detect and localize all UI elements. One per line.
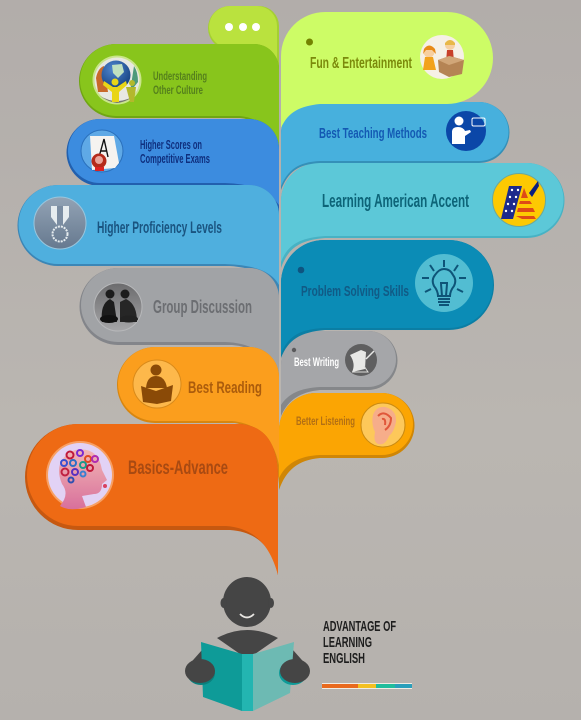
panel: best reading xyxy=(117,347,279,484)
panel: basics-advance xyxy=(25,424,278,575)
panel: best writing xyxy=(281,331,398,416)
panel: fun and entertainment xyxy=(281,12,493,128)
icon: three dots xyxy=(225,23,260,31)
panel: dots speech bubble xyxy=(208,6,279,125)
title: advantage of learning english: LEARNING xyxy=(323,634,372,651)
icon: light bulb xyxy=(415,254,473,312)
icon: exam paper xyxy=(81,130,123,172)
icon: dot xyxy=(306,38,313,46)
text: problem solving skills: Problem Solving Skills xyxy=(301,283,409,300)
panel: understanding other culture xyxy=(79,44,279,165)
text: higher proficiency levels: Higher Proficiency Levels xyxy=(97,219,222,237)
panel: best teaching methods xyxy=(281,102,510,190)
head xyxy=(186,577,309,680)
text: better listening: Better Listening xyxy=(296,416,355,428)
icon: children in box xyxy=(420,35,464,79)
icon: dot xyxy=(292,348,296,352)
icon: two people xyxy=(94,283,142,331)
text: best teaching methods: Best Teaching Methods xyxy=(319,126,427,142)
panel: group discussion xyxy=(80,268,279,405)
book xyxy=(187,642,307,711)
text: group discussion: Group Discussion xyxy=(153,296,252,317)
text: understanding other culture: Other Culture xyxy=(153,83,203,97)
icon: reader xyxy=(133,360,181,408)
icon: ear xyxy=(361,403,405,447)
text: best writing: Best Writing xyxy=(294,357,339,369)
text: best reading: Best Reading xyxy=(188,378,262,397)
icon: medal xyxy=(34,197,86,249)
icon: teacher at board xyxy=(446,111,486,151)
title: advantage of learning english xyxy=(323,618,396,667)
icon: head with letters xyxy=(46,441,114,509)
text: higher scores: Competitive Exams xyxy=(140,152,210,166)
title: advantage of learning english: ENGLISH xyxy=(323,650,365,667)
text: higher scores xyxy=(140,138,210,166)
icon: globe and people xyxy=(92,56,142,104)
icon: person reading book xyxy=(185,577,310,711)
text: understanding other culture xyxy=(153,69,207,97)
panel: problem solving skills xyxy=(281,240,494,358)
panel: higher proficiency levels xyxy=(18,185,279,296)
panel: higher scores xyxy=(67,119,279,222)
text: learning american accent: Learning American Accent xyxy=(322,190,469,211)
panel: learning american accent xyxy=(281,163,564,268)
panel: better listening xyxy=(279,393,414,490)
color legend bar xyxy=(322,683,412,689)
icon: dot xyxy=(298,267,304,273)
text: fun and entertainment: Fun & Entertainment xyxy=(310,55,412,72)
text: basics-advance: Basics-Advance xyxy=(128,458,228,479)
hands xyxy=(185,659,310,683)
icon: letter a with flag xyxy=(492,174,546,226)
text: higher scores: Higher Scores on xyxy=(140,138,202,152)
title: advantage of learning english: ADVANTAGE OF xyxy=(323,618,396,635)
icon: writing paper xyxy=(345,344,377,376)
text: understanding other culture: Understanding xyxy=(153,69,207,83)
